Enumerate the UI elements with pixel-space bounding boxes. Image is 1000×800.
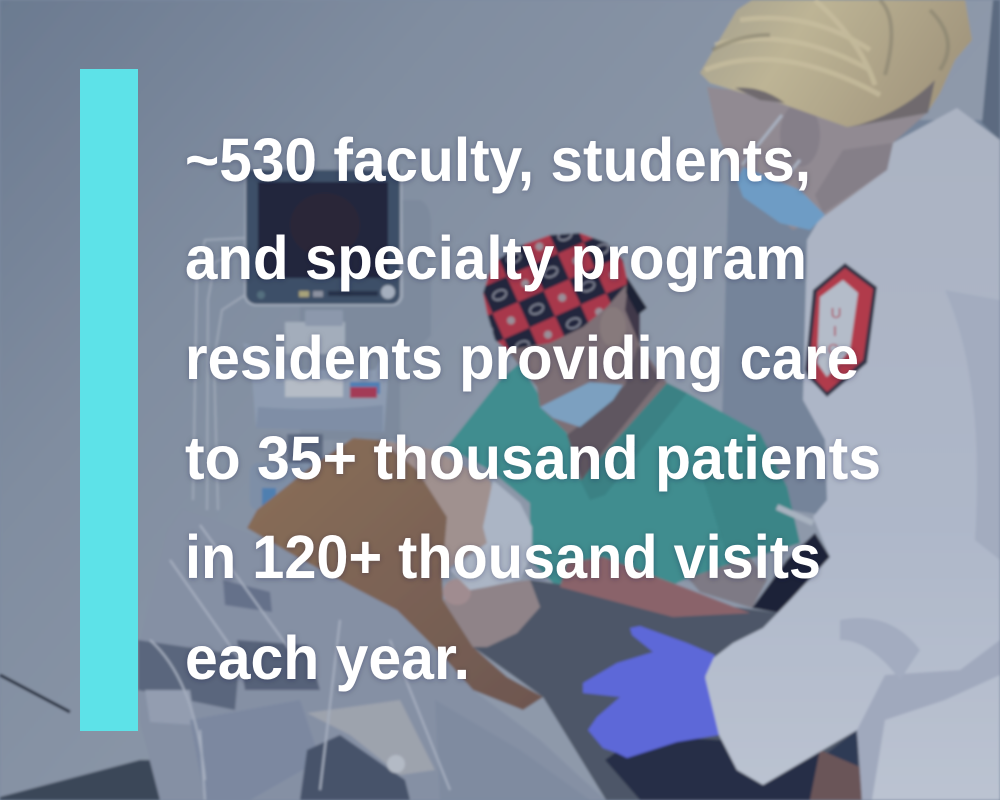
main statement text: and specialty program <box>185 224 807 292</box>
main statement text: in 120+ thousand visits <box>185 523 821 591</box>
surgical mask <box>540 382 623 427</box>
university patch: U <box>831 305 841 322</box>
lower equipment tray <box>250 463 320 510</box>
university patch: C <box>828 341 839 358</box>
patient monitor <box>244 170 403 306</box>
monitor shadow on wall <box>300 200 431 440</box>
cables on wall <box>193 238 245 510</box>
dentist in green scrubs <box>447 233 800 600</box>
dentist forearm and armrest <box>688 507 830 613</box>
main statement text: residents providing care <box>185 324 859 392</box>
main statement text: to 35+ thousand patients <box>185 424 881 492</box>
cyan accent bar <box>80 69 138 731</box>
clinician face, ear and neck <box>707 87 927 230</box>
main statement text: each year. <box>185 624 470 692</box>
patient hair <box>247 438 543 710</box>
university patch <box>805 263 877 397</box>
clinician in white coat <box>705 108 1000 800</box>
dentist head and neck <box>507 283 667 480</box>
main statement text <box>185 126 881 692</box>
clinician blonde hair <box>700 0 972 127</box>
blue nitrile glove <box>583 626 719 758</box>
plastic-covered dental chair <box>138 510 606 800</box>
patient shirt <box>473 557 862 800</box>
cap tie <box>626 277 647 315</box>
patient face and neck <box>380 440 540 647</box>
patterned scrub cap <box>483 233 628 350</box>
clinician surgical mask <box>737 167 825 230</box>
supply basket <box>243 343 388 469</box>
main statement text: ~530 faculty, students, <box>185 126 811 194</box>
patient patterned mask <box>450 480 532 590</box>
university patch: I <box>833 323 837 340</box>
monitor bracket <box>285 310 345 354</box>
